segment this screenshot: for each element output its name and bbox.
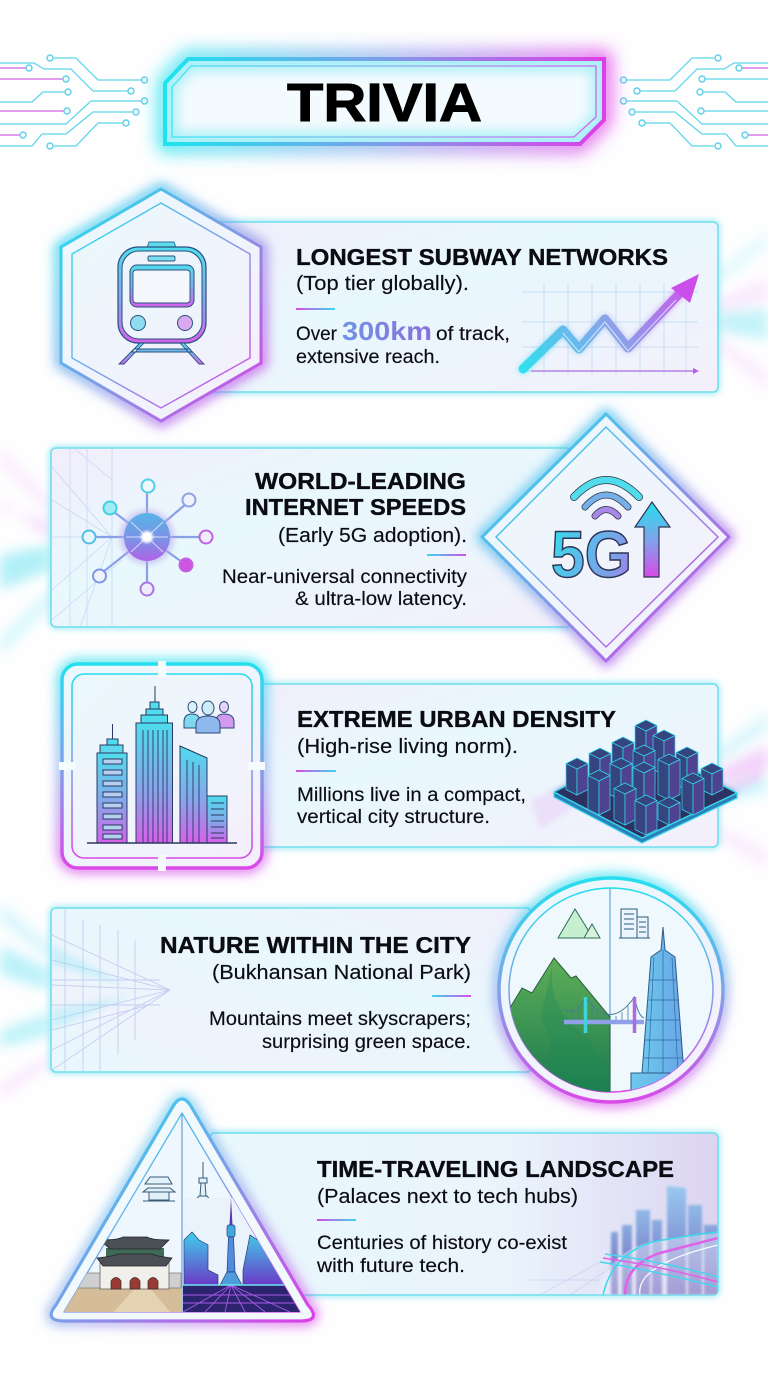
panel: time-traveling landscape — [210, 1133, 718, 1295]
right circuit decoration — [620, 55, 768, 149]
icon: up arrow — [635, 502, 670, 577]
illustration: mountain and tower — [510, 927, 684, 1092]
illustration: palace and tech hub — [60, 1198, 303, 1314]
square frame badge — [59, 661, 265, 871]
body text: Mountains meet skyscrapers; — [209, 1009, 471, 1030]
divider — [432, 995, 471, 997]
title banner — [165, 58, 604, 145]
body text: of track, — [436, 324, 510, 345]
perspective grid — [52, 449, 122, 627]
diamond badge — [482, 414, 729, 661]
body text: vertical city structure. — [297, 807, 490, 828]
heading: NATURE WITHIN THE CITY — [160, 932, 471, 958]
body text — [316, 1233, 568, 1277]
body text — [209, 1009, 471, 1053]
icon: network hub — [82, 480, 212, 596]
subheading: (Bukhansan National Park) — [212, 962, 471, 984]
heading — [245, 468, 466, 520]
icon: people — [184, 701, 234, 733]
body text: with future tech. — [316, 1256, 465, 1277]
heading: TIME-TRAVELING LANDSCAPE — [317, 1156, 674, 1182]
body text: & ultra-low latency. — [295, 589, 467, 610]
circle badge — [499, 878, 723, 1102]
heading: EXTREME URBAN DENSITY — [297, 706, 616, 732]
divider — [317, 1219, 356, 1221]
icon: small tower — [194, 1162, 212, 1202]
heading: WORLD-LEADING — [255, 468, 466, 494]
body text: extensive reach. — [296, 347, 440, 368]
background light rays — [0, 232, 768, 1097]
panel: world-leading internet speeds — [51, 448, 571, 627]
panel: nature within the city — [51, 908, 531, 1072]
heading: INTERNET SPEEDS — [245, 494, 466, 520]
subheading: (High-rise living norm). — [297, 736, 518, 758]
body text: Centuries of history co-exist — [317, 1233, 568, 1254]
hexagon badge — [60, 188, 262, 422]
icon: isometric city — [554, 720, 737, 843]
body text: Over — [296, 324, 338, 345]
triangle badge — [51, 1099, 313, 1321]
heading: LONGEST SUBWAY NETWORKS — [296, 244, 668, 270]
divider — [296, 308, 335, 310]
body text — [296, 316, 510, 368]
title text: TRIVIA — [287, 73, 482, 133]
icon: small mountains — [558, 909, 600, 938]
platform rays — [530, 770, 760, 830]
divider — [296, 770, 336, 772]
chart: rising arrow — [522, 274, 699, 374]
left circuit decoration — [0, 55, 148, 149]
body text — [222, 567, 468, 610]
divider — [427, 554, 466, 556]
subheading: (Early 5G adoption). — [278, 525, 467, 547]
icon: skyscrapers — [87, 686, 237, 843]
subheading: (Top tier globally). — [296, 273, 469, 295]
panel: longest subway networks — [200, 222, 718, 392]
icon: small hanok gate — [143, 1177, 175, 1201]
body text: Millions live in a compact, — [297, 785, 526, 806]
body text: surprising green space. — [262, 1032, 471, 1053]
body text — [297, 785, 526, 828]
icon: train — [118, 242, 206, 364]
body text: Near-universal connectivity — [222, 567, 468, 588]
illustration: future city with light trails — [530, 1186, 718, 1295]
icon: small buildings — [619, 909, 650, 938]
5G label: 5G — [551, 517, 632, 591]
subheading: (Palaces next to tech hubs) — [317, 1186, 578, 1208]
stat: 300km: 300km — [342, 316, 432, 346]
panel: extreme urban density — [240, 684, 760, 847]
icon: wifi signal — [574, 480, 639, 516]
perspective grid — [52, 909, 170, 1071]
